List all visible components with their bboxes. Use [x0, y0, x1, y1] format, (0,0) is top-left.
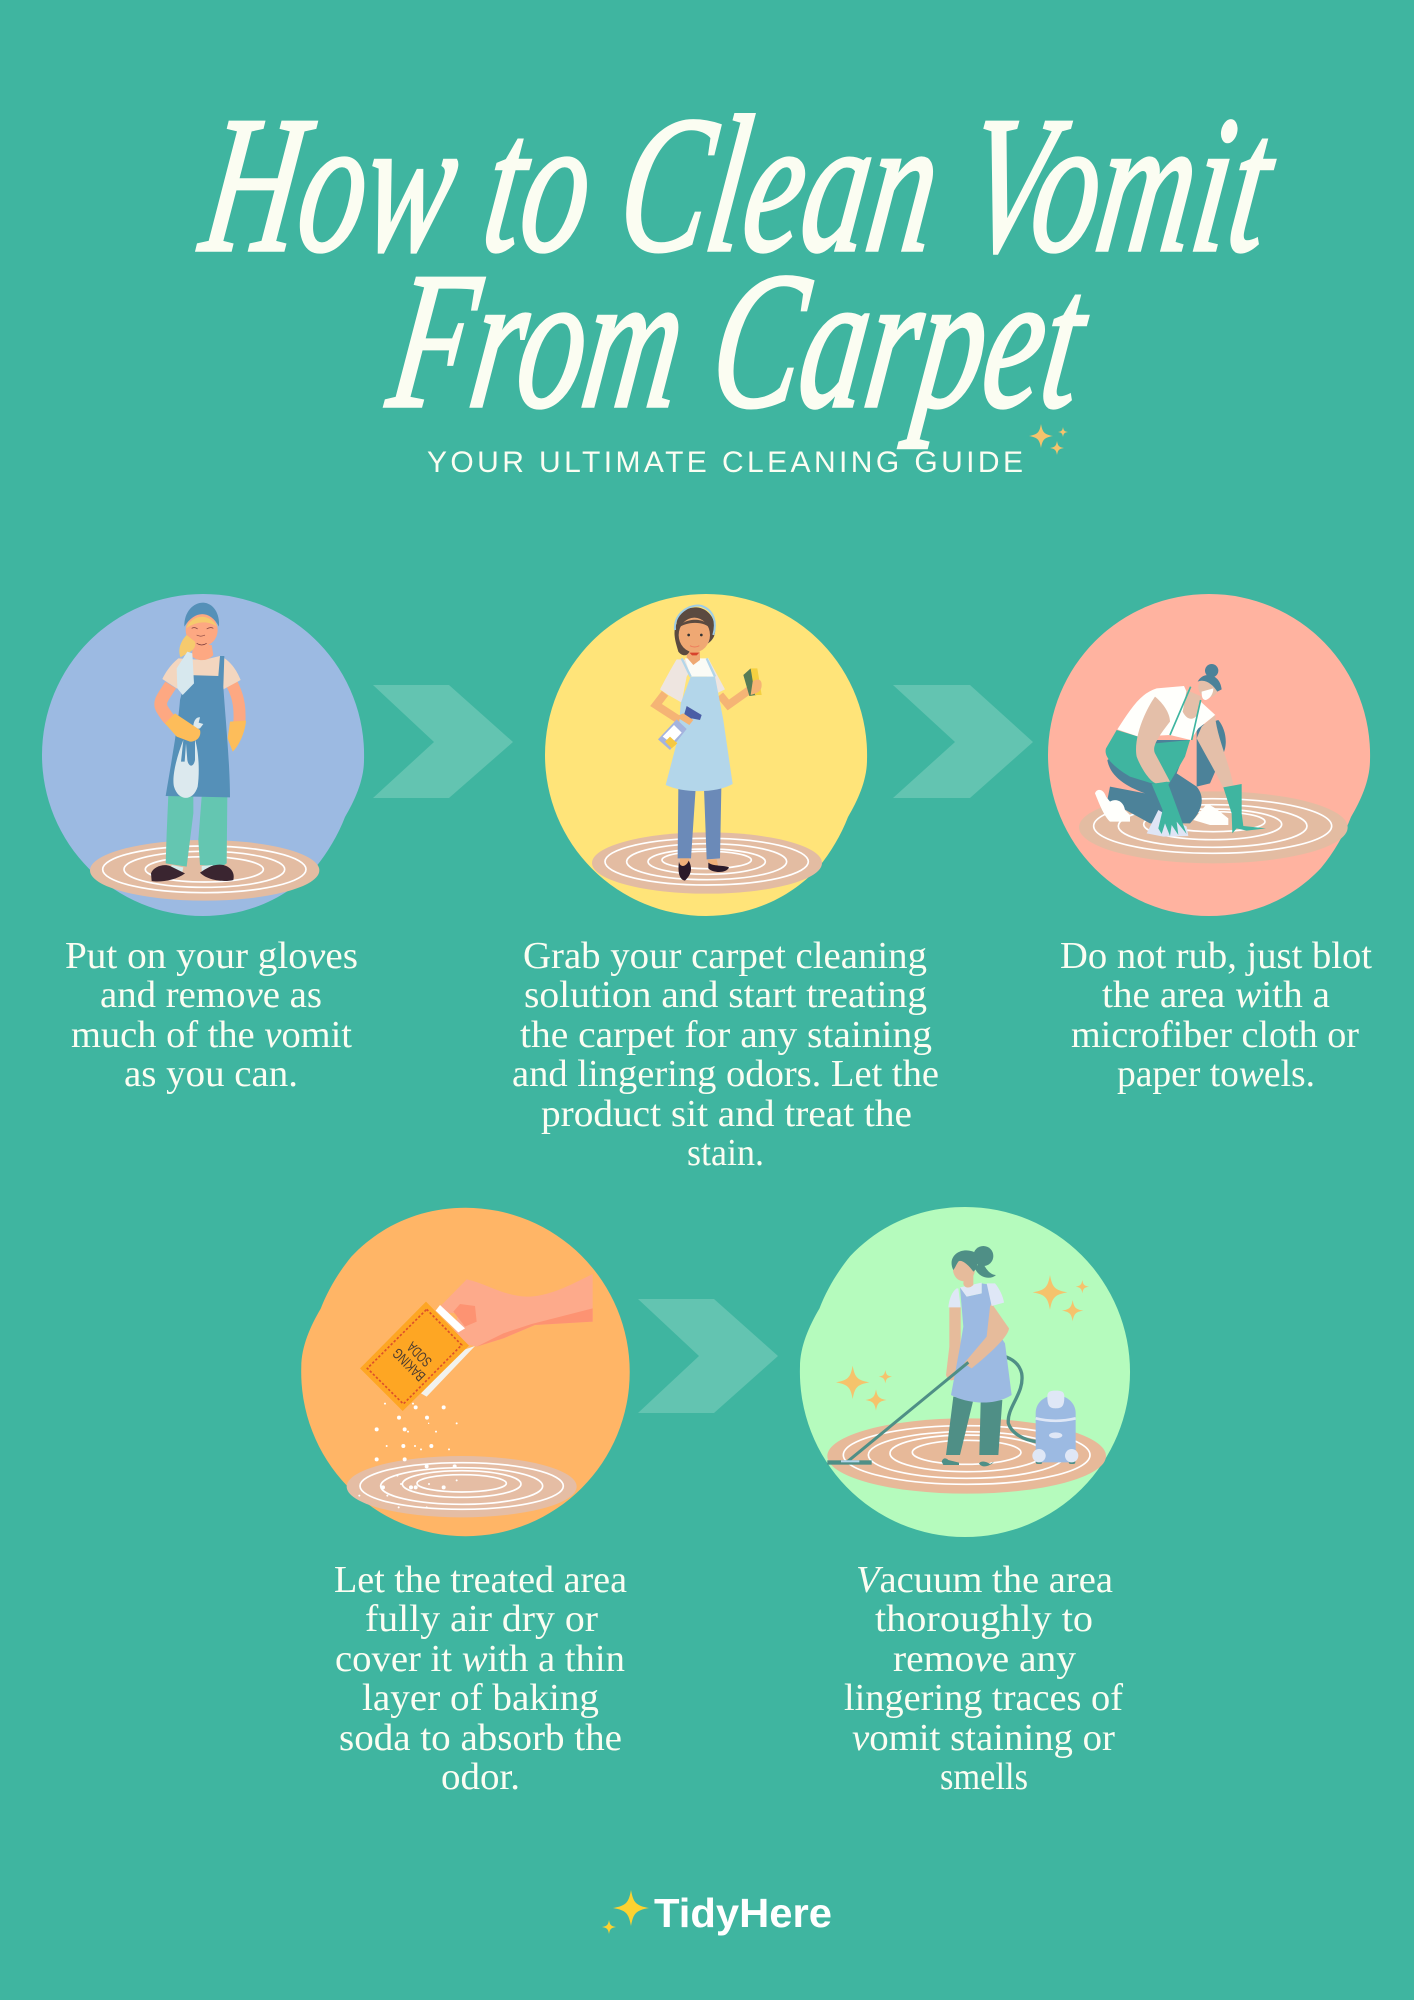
- text block: step 5: [844, 1559, 1123, 1798]
- baking soda box: [360, 1302, 475, 1411]
- text block: step 4: soda to absorb the: [339, 1717, 622, 1759]
- text block: step 4: cover it with a thin: [335, 1638, 625, 1680]
- title: From Carpet: [378, 233, 1100, 449]
- sponge: [743, 668, 762, 696]
- baking soda box: BAKING: [390, 1344, 429, 1384]
- text block: step 4: [334, 1559, 627, 1798]
- text block: step 1: Put on your gloves: [65, 935, 358, 977]
- text block: step 5: remove any: [893, 1638, 1076, 1680]
- baking soda particles: [358, 1403, 458, 1508]
- icon: title sparkles: [1029, 424, 1068, 455]
- text block: step 3: microfiber cloth or: [1071, 1014, 1359, 1056]
- carpet: [90, 840, 319, 901]
- baking soda box: SODA: [404, 1338, 436, 1369]
- figure: woman vacuuming: [827, 1246, 1012, 1466]
- figure: woman with spray bottle and sponge: [656, 606, 762, 881]
- panel: step 2 illustration: [545, 594, 867, 916]
- carpet: [827, 1418, 1106, 1494]
- carpet: [347, 1456, 577, 1517]
- text block: step 1: and remove as: [100, 974, 322, 1016]
- text block: step 1: much of the vomit: [71, 1014, 352, 1056]
- text block: step 2: product sit and treat the: [541, 1093, 912, 1135]
- title: [190, 77, 1287, 449]
- text block: step 5: Vacuum the area: [856, 1559, 1113, 1601]
- text block: step 2: Grab your carpet cleaning: [523, 935, 927, 977]
- text block: step 4: odor.: [441, 1756, 520, 1798]
- text block: step 5: lingering traces of: [844, 1677, 1123, 1719]
- text block: step 5: vomit staining or: [852, 1717, 1115, 1759]
- logo: TidyHere: TidyHere: [654, 1890, 832, 1936]
- panel: step 3 illustration: [1048, 594, 1370, 916]
- panel: step 1 illustration: [42, 594, 364, 916]
- figure: woman with gloves and bag: [151, 603, 246, 881]
- text block: step 2: solution and start treating: [524, 974, 927, 1016]
- text block: step 2: and lingering odors. Let the: [512, 1053, 939, 1095]
- text block: step 1: as you can.: [124, 1053, 298, 1095]
- carpet: [592, 832, 822, 894]
- arrow: step 1 to 2: [373, 685, 513, 798]
- text block: step 3: [1060, 935, 1372, 1095]
- hand: [435, 1274, 593, 1347]
- panel: step 5 illustration: [800, 1207, 1130, 1537]
- text block: step 4: fully air dry or: [365, 1598, 598, 1640]
- vacuum cleaner: [1032, 1391, 1078, 1464]
- arrow: step 2 to 3: [893, 685, 1033, 798]
- text block: step 2: the carpet for any staining: [520, 1014, 932, 1056]
- text block: step 1: [65, 935, 358, 1095]
- text block: step 5: smells: [940, 1756, 1028, 1798]
- figure: woman kneeling and blotting: [1095, 664, 1266, 837]
- panel: step 4 illustration: [301, 1208, 630, 1536]
- vacuum hose: [970, 1354, 1037, 1442]
- text block: step 5: thoroughly to: [875, 1598, 1093, 1640]
- subtitle: YOUR ULTIMATE CLEANING GUIDE: [427, 446, 1023, 479]
- text block: step 3: Do not rub, just blot: [1060, 935, 1372, 977]
- text block: step 2: stain.: [687, 1132, 764, 1174]
- text block: step 4: layer of baking: [362, 1677, 599, 1719]
- sparkles: [836, 1275, 1089, 1411]
- carpet: [1079, 791, 1348, 863]
- text block: step 3: the area with a: [1102, 974, 1330, 1016]
- text block: step 4: Let the treated area: [334, 1559, 627, 1601]
- arrow: step 4 to 5: [638, 1299, 778, 1413]
- spray bottle: [658, 706, 702, 750]
- text block: step 3: paper towels.: [1117, 1053, 1315, 1095]
- text block: step 2: [512, 935, 939, 1174]
